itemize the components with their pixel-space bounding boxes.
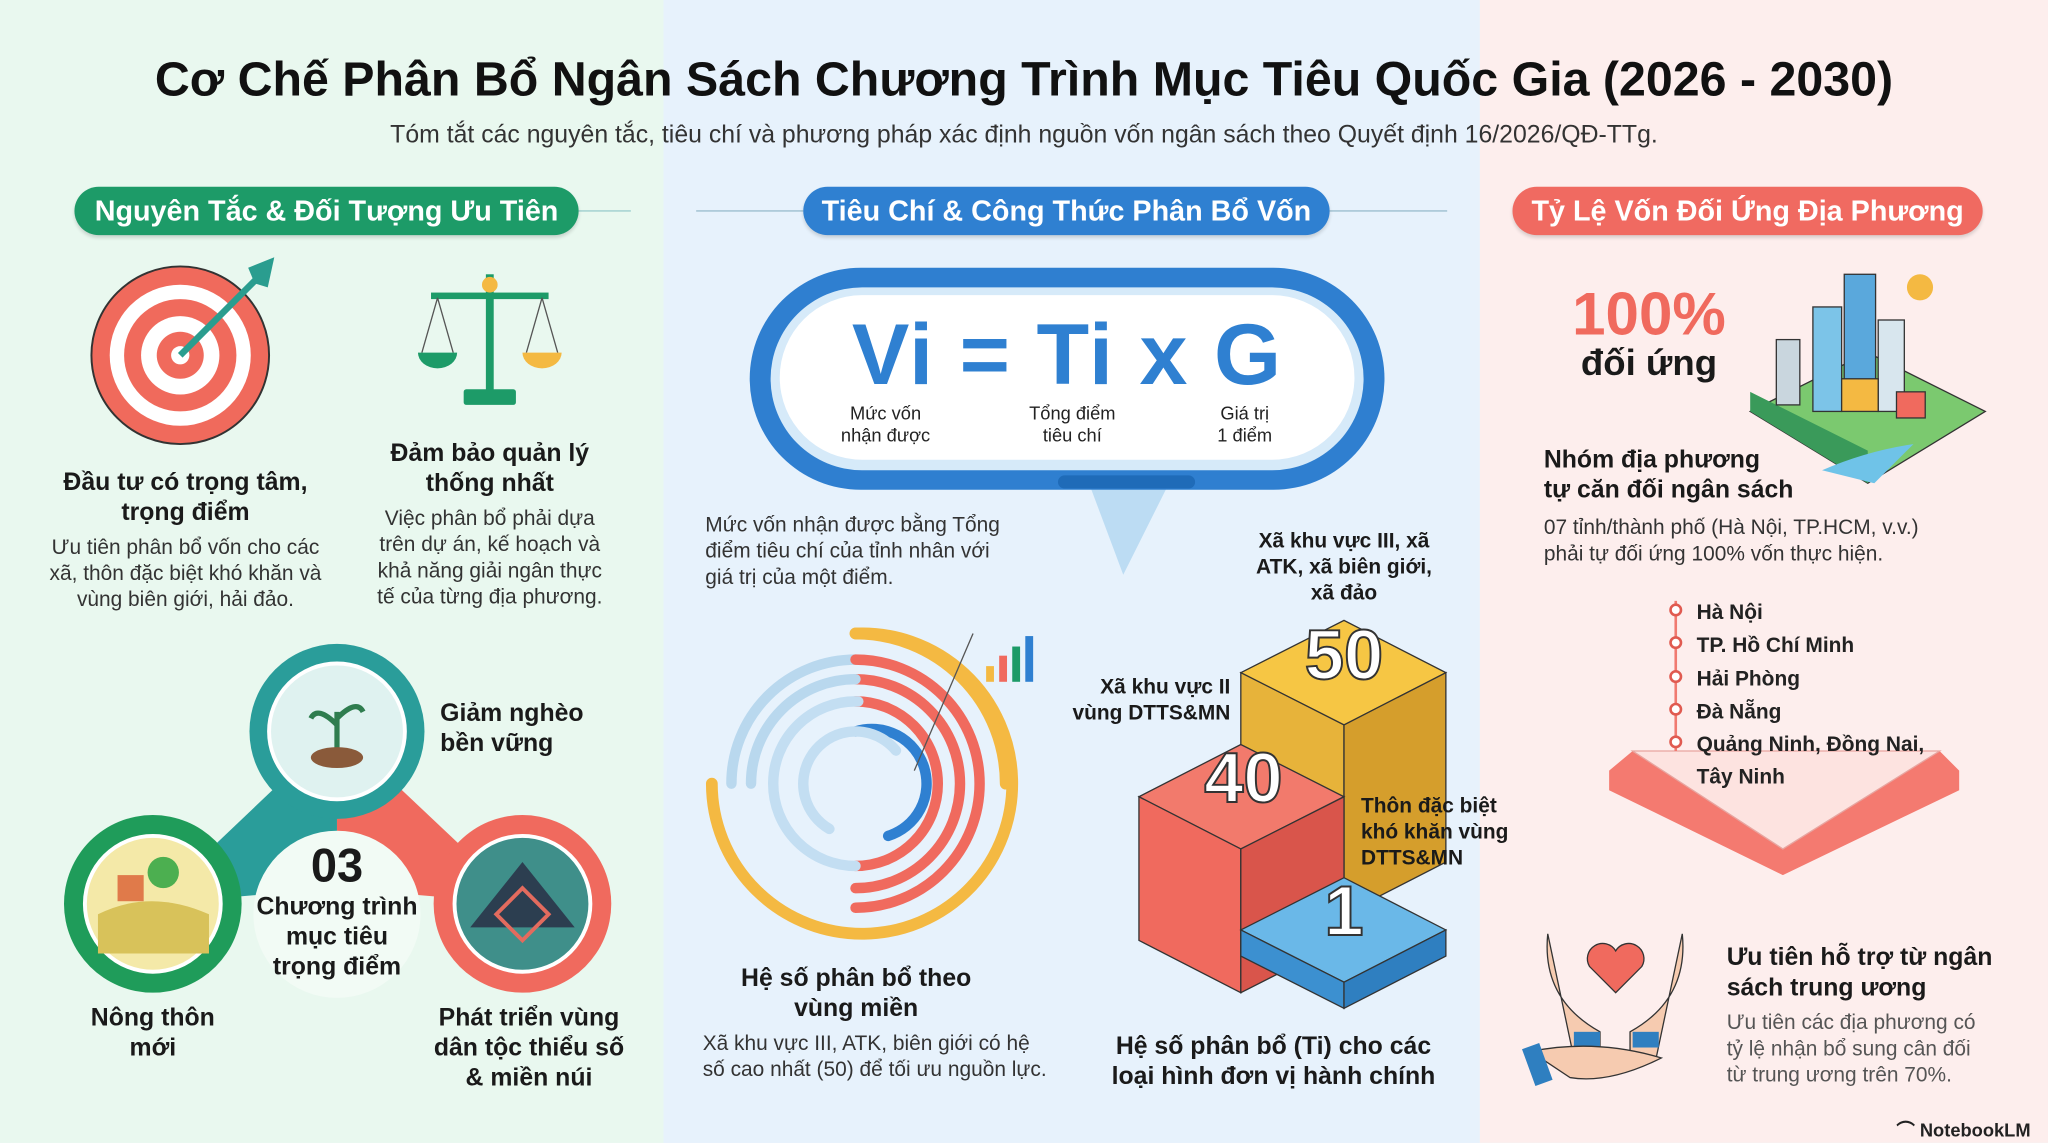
text: unified management: Đảm bảo quản lý thống nhất <box>391 440 589 498</box>
tray <box>1609 600 1960 875</box>
text: central support: Ưu tiên hỗ trợ từ ngân sách trung ương <box>1727 944 1992 1002</box>
diagram: 3 programs <box>64 644 624 1092</box>
formula box: Tổng điểm tiêu chí <box>1029 402 1116 445</box>
icon: target <box>90 257 274 445</box>
label: 03 programs: 03 <box>311 839 363 892</box>
heading: principles <box>74 187 579 235</box>
title: Cơ Chế Phân Bổ Ngân Sách Chương Trình Mục Tiêu Quốc Gia (2026 - 2030) <box>155 52 1893 106</box>
text: self-balancing group: 07 tỉnh/thành phố (Hà Nội, TP.HCM, v.v.) phải tự đối ứng 100% vốn thực hiện. <box>1544 517 1919 566</box>
label: 03 programs: trọng điểm <box>273 953 401 981</box>
formula labels: Mức vốn nhận được <box>841 402 930 445</box>
heading: principles: Nguyên Tắc & Đối Tượng Ưu Tiên <box>95 195 558 227</box>
text: đối ứng <box>1581 342 1717 383</box>
text: unified management: Việc phân bổ phải dựa trên dự án, kế hoạch và khả năng giải ngân thực tế của từng địa phương. <box>377 508 602 609</box>
text: central support: Ưu tiên các địa phương có tỷ lệ nhận bổ sung cân đối từ trung ương trên 70%. <box>1727 1012 1976 1087</box>
label: new rural: mới <box>130 1034 176 1062</box>
list: provinces: Quảng Ninh, Đồng Nai, <box>1697 734 1924 756</box>
text: focused investment <box>50 469 322 611</box>
label: poverty <box>440 700 584 758</box>
label: 1: Thôn đặc biệt khó khăn vùng DTTS&MN <box>1361 795 1508 870</box>
heading: criteria: Tiêu Chí & Công Thức Phân Bổ Vốn <box>822 195 1311 227</box>
list: provinces: TP. Hồ Chí Minh <box>1697 635 1854 657</box>
icon: scale <box>418 274 562 405</box>
chart: isometric blocks: 1 <box>1324 871 1364 950</box>
text: regional coefficient: Xã khu vực III, ATK, biên giới có hệ <box>703 1033 1030 1055</box>
label: new rural <box>91 1004 215 1062</box>
list: provinces: Hà Nội <box>1697 602 1763 624</box>
formula text: Vi = Ti x G <box>852 306 1282 402</box>
heading: criteria <box>803 187 1330 235</box>
text: regional coefficient: Hệ số phân bổ theo <box>741 965 971 993</box>
label: 03 programs: mục tiêu <box>286 923 388 951</box>
text: focused investment: Ưu tiên phân bổ vốn cho các xã, thôn đặc biệt khó khăn và vùng biên giới, hải đảo. <box>50 537 321 611</box>
list: provinces <box>1696 602 1924 790</box>
formula box: Giá trị <box>1220 402 1269 423</box>
heading: local ratio <box>1512 187 1983 235</box>
label: new rural: Nông thôn <box>91 1004 215 1032</box>
label: poverty: bền vững <box>440 730 553 758</box>
text: regional coefficient <box>703 965 1047 1081</box>
text: regional coefficient: vùng miền <box>794 995 918 1023</box>
label: 50: Xã khu vực III, xã ATK, xã biên giới, xã đảo <box>1256 530 1432 605</box>
list: provinces: Hải Phòng <box>1697 668 1800 690</box>
text: Ti coefficient: Hệ số phân bổ (Ti) cho các loại hình đơn vị hành chính <box>1112 1033 1435 1091</box>
subtitle: Tóm tắt các nguyên tắc, tiêu chí và phương pháp xác định nguồn vốn ngân sách theo Quyết định 16/2026/QĐ-TTg. <box>390 121 1658 149</box>
chart: concentric arcs <box>706 628 1034 940</box>
chart: isometric blocks <box>1072 530 1508 1010</box>
formula description: Mức vốn nhận được bằng Tổng điểm tiêu chí của tỉnh nhân với giá trị của một điểm. <box>705 515 1000 589</box>
text: self-balancing group <box>1544 447 1919 566</box>
logo: ⌒ NotebookLM <box>1896 1119 2031 1140</box>
formula box <box>750 268 1384 574</box>
label: 03 programs: Chương trình <box>256 893 417 921</box>
label: ethnic: dân tộc thiểu số <box>434 1034 624 1062</box>
text: central support <box>1727 942 1992 1087</box>
list: provinces: Tây Ninh <box>1697 767 1785 790</box>
label: ethnic: Phát triển vùng <box>439 1004 619 1032</box>
heading: local ratio: Tỷ Lệ Vốn Đối Ứng Địa Phương <box>1531 195 1964 227</box>
chart: isometric blocks: 40 <box>1204 738 1283 817</box>
label: 03 programs <box>256 839 417 981</box>
label: 40: Xã khu vực II vùng DTTS&MN <box>1072 677 1230 725</box>
text: self-balancing group: Nhóm địa phương <box>1544 447 1760 474</box>
list: provinces: Đà Nẵng <box>1697 701 1781 723</box>
label: ethnic <box>434 1004 624 1092</box>
text: self-balancing group: tự căn đối ngân sách <box>1544 477 1793 504</box>
text: regional coefficient: số cao nhất (50) để tối ưu nguồn lực. <box>703 1059 1047 1081</box>
text: 100%: 100% <box>1572 280 1726 347</box>
label: ethnic: & miền núi <box>466 1064 592 1092</box>
text: unified management <box>377 440 602 609</box>
formula box: 1 điểm <box>1217 424 1272 445</box>
label: poverty: Giảm nghèo <box>440 700 584 728</box>
icon: city <box>1749 274 1987 484</box>
chart: isometric blocks: 50 <box>1305 615 1383 694</box>
text: focused investment: Đầu tư có trọng tâm, trọng điểm <box>63 469 308 526</box>
icon: hands heart <box>1522 934 1684 1086</box>
